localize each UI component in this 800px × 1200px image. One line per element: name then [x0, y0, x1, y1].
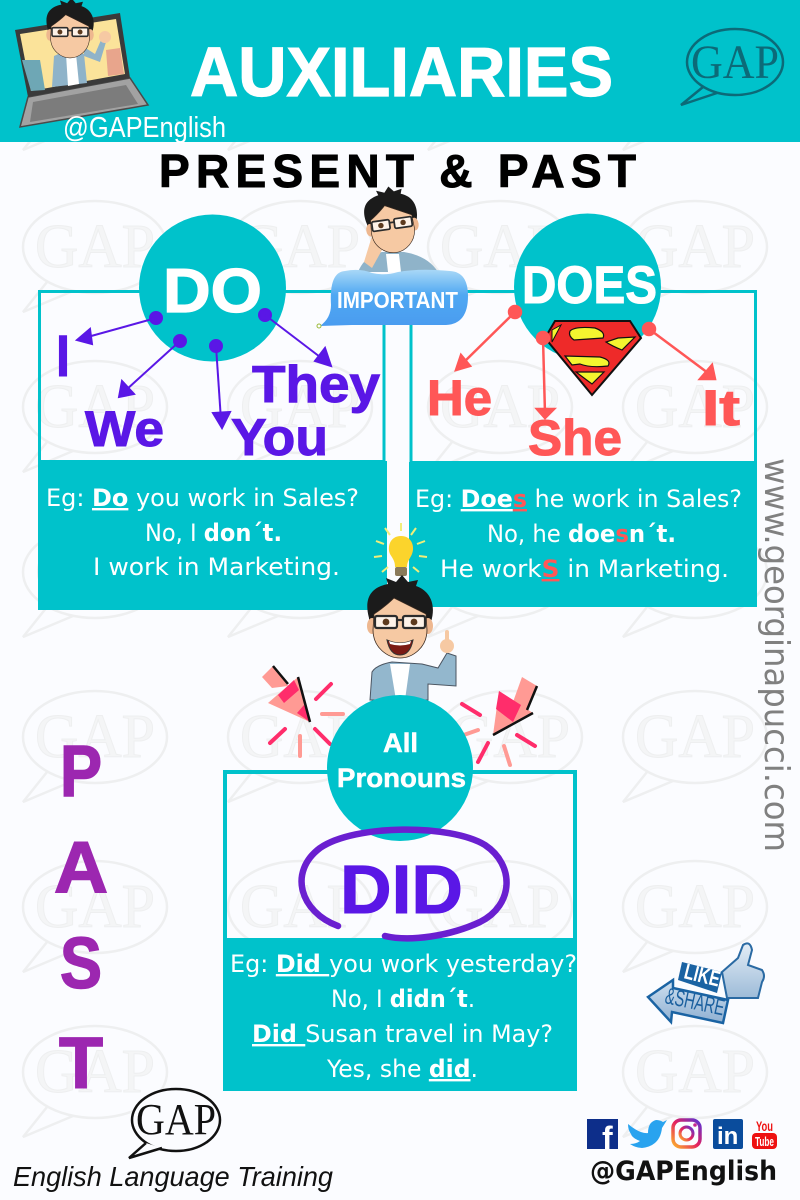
icon: instagram: [673, 1120, 700, 1147]
DOES example background: [409, 462, 757, 607]
icon: like and share: &SHARE: [663, 982, 727, 1020]
icon: GAP logo top right: [681, 29, 783, 105]
icon: facebook: [587, 1119, 618, 1156]
handle: bottom: @GAPEnglish: [590, 1156, 777, 1187]
header band: [0, 0, 800, 142]
panel: DOES: He workS in Marketing.: [440, 555, 729, 583]
watermark: GAP logo pattern: GAP: [35, 213, 155, 281]
watermark: GAP logo pattern: GAP: [440, 538, 560, 606]
icon: superman shield: [545, 321, 641, 395]
handle: top: @GAPEnglish: [63, 112, 226, 144]
vertical text: PAST: S: [60, 924, 102, 1004]
callout: important: [317, 270, 468, 328]
icon: right pointing arrow: [458, 677, 537, 765]
title: AUXILIARIES: [190, 33, 613, 111]
DO example background: [38, 461, 387, 610]
icon: GAP logo top right: GAP: [691, 36, 779, 89]
watermark: GAP logo pattern: GAP: [635, 703, 755, 771]
DO frame: [40, 292, 384, 462]
panel: DO: No, I don´t.: [145, 519, 282, 547]
watermark: GAP logo pattern: GAP: [635, 213, 755, 281]
icon: linkedin: in: [717, 1123, 738, 1150]
watermark: GAP logo pattern: GAP: [450, 703, 570, 771]
callout: important: IMPORTANT: [337, 287, 458, 313]
watermark: GAP logo pattern: GAP: [440, 51, 560, 119]
DID example background: [223, 940, 577, 1091]
pronouns: It: [702, 380, 740, 436]
DID heading: DID: [340, 851, 463, 928]
watermark: GAP logo pattern: GAP: [635, 873, 755, 941]
DID circle: [327, 695, 473, 841]
panel: DID: No, I didn´t.: [331, 985, 475, 1013]
icon: like and share: LIKE: [682, 959, 723, 992]
DOES heading: DOES: [522, 256, 657, 315]
DID examples: Eg: Did you work yesterday?: [230, 950, 577, 978]
watermark: GAP logo pattern: GAP: [240, 213, 360, 281]
DO examples: Eg: Do you work in Sales?: [46, 484, 359, 512]
panel: DOES: [409, 214, 757, 607]
all pronouns label: All: [383, 728, 418, 758]
panel: DO: I work in Marketing.: [93, 553, 340, 581]
icon: youtube: You: [756, 1118, 773, 1134]
icon: twitter: [628, 1120, 667, 1148]
vertical text: PAST: T: [59, 1024, 103, 1104]
website url: www.georginapucci.com: [756, 458, 796, 852]
watermark: GAP logo pattern: GAP: [35, 1038, 155, 1106]
DID frame: [225, 772, 575, 940]
DOES circle: [514, 214, 661, 360]
DO heading: DO: [163, 257, 262, 326]
watermark: GAP logo pattern: GAP: [240, 703, 360, 771]
pronouns: [427, 370, 740, 466]
pronouns: I: [56, 324, 70, 389]
watermark: GAP logo pattern: GAP: [440, 873, 560, 941]
watermark: GAP logo pattern: GAP: [635, 1038, 755, 1106]
watermark: GAP logo pattern: GAP: [635, 51, 755, 119]
icon: youtube: [752, 1118, 777, 1149]
arrows to pronouns: [77, 309, 331, 428]
vertical text: PAST: P: [60, 732, 102, 812]
panel: DID: Pronouns: [337, 763, 466, 793]
watermark: GAP logo pattern: GAP: [35, 538, 155, 606]
pronouns: We: [85, 401, 164, 457]
watermark: GAP logo pattern: GAP: [440, 373, 560, 441]
vertical text: PAST: A: [54, 828, 108, 908]
pronouns: You: [231, 409, 328, 467]
tagline: English Language Training: [13, 1161, 333, 1192]
pronouns: She: [528, 410, 622, 466]
icon: light bulb: [374, 523, 427, 576]
social icons: [587, 1118, 777, 1156]
panel: DID: [223, 695, 577, 1091]
icon: youtube: Tube: [755, 1134, 774, 1149]
watermark: GAP logo pattern: GAP: [635, 373, 755, 441]
DOES examples: Eg: Does he work in Sales?: [415, 485, 742, 513]
watermark: GAP logo pattern: GAP: [240, 51, 360, 119]
pronouns: [56, 324, 380, 467]
vertical text: PAST: [54, 732, 108, 1104]
watermark: GAP logo pattern: GAP: [635, 538, 755, 606]
icon: linkedin: [713, 1119, 743, 1150]
DO circle: [139, 214, 286, 362]
icon: pointing avatar: [367, 575, 456, 700]
icon: laptop with waving avatar: [15, 0, 148, 127]
panel: DID: Did Susan travel in May?: [252, 1020, 553, 1048]
scribble circle: [302, 830, 507, 938]
icon: GAP logo bottom: [129, 1089, 220, 1158]
watermark: GAP logo pattern: GAP: [35, 373, 155, 441]
pronouns: They: [252, 356, 380, 414]
watermark: GAP logo pattern: GAP: [440, 213, 560, 281]
icon: facebook: f: [602, 1120, 613, 1156]
panel: DOES: No, he doesn´t.: [487, 520, 676, 548]
watermark: GAP logo pattern: GAP: [240, 873, 360, 941]
icon: GAP logo bottom: GAP: [136, 1095, 216, 1144]
pronouns: He: [427, 370, 492, 426]
panel: DID: Yes, she did.: [326, 1055, 478, 1083]
icon: like and share: [648, 943, 764, 1023]
watermark: GAP logo pattern: GAP: [35, 51, 155, 119]
panel: DO: [38, 214, 387, 610]
icon: left pointing arrow: [262, 666, 343, 756]
watermark: GAP logo pattern: GAP: [240, 373, 360, 441]
watermark: GAP logo pattern: GAP: [35, 873, 155, 941]
arrows to pronouns: [456, 306, 715, 418]
watermark: GAP logo pattern: GAP: [35, 703, 155, 771]
DOES frame: [411, 292, 756, 462]
subtitle: PRESENT & PAST: [159, 145, 636, 197]
watermark: GAP logo pattern: GAP: [240, 538, 360, 606]
icon: thinking avatar: [358, 183, 438, 272]
